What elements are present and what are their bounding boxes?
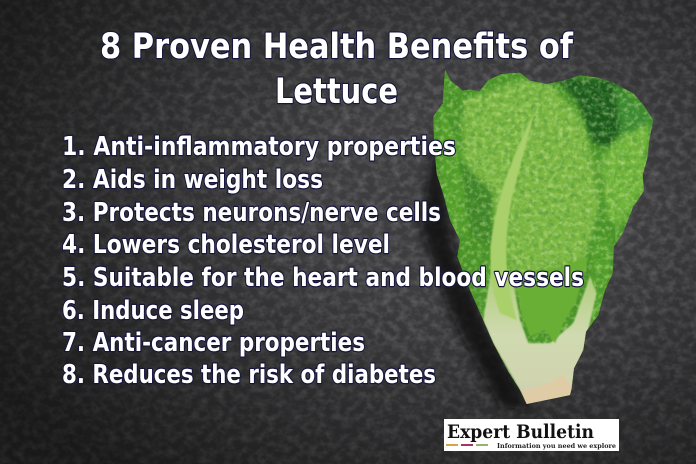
lettuce central rib (490, 113, 533, 320)
lettuce body (433, 70, 654, 404)
lettuce ruffled lower fringe (517, 257, 588, 343)
logo: Expert Bulletin (444, 419, 619, 451)
item 1: 1. Anti-inflammatory properties (62, 132, 456, 162)
logo colour dashes (446, 444, 488, 446)
item 2: 2. Aids in weight loss (62, 165, 323, 195)
item 8: 8. Reduces the risk of diabetes (62, 360, 436, 390)
benefits list (62, 132, 584, 390)
lettuce shadow (420, 127, 530, 410)
title: Lettuce (275, 72, 398, 112)
lettuce pale stem (483, 267, 597, 404)
item 4: 4. Lowers cholesterol level (62, 230, 390, 260)
item 6: 6. Induce sleep (62, 296, 244, 326)
logo tagline: Information you need we explore (497, 442, 616, 450)
title (100, 27, 574, 112)
lettuce illustration (420, 60, 670, 410)
title: 8 Proven Health Benefits of (100, 27, 574, 67)
lettuce root end (522, 375, 572, 405)
item 5: 5. Suitable for the heart and blood vessels (62, 263, 584, 293)
logo wordmark: Expert Bulletin (447, 421, 594, 443)
item 3: 3. Protects neurons/nerve cells (62, 198, 441, 228)
item 7: 7. Anti-cancer properties (62, 328, 365, 358)
